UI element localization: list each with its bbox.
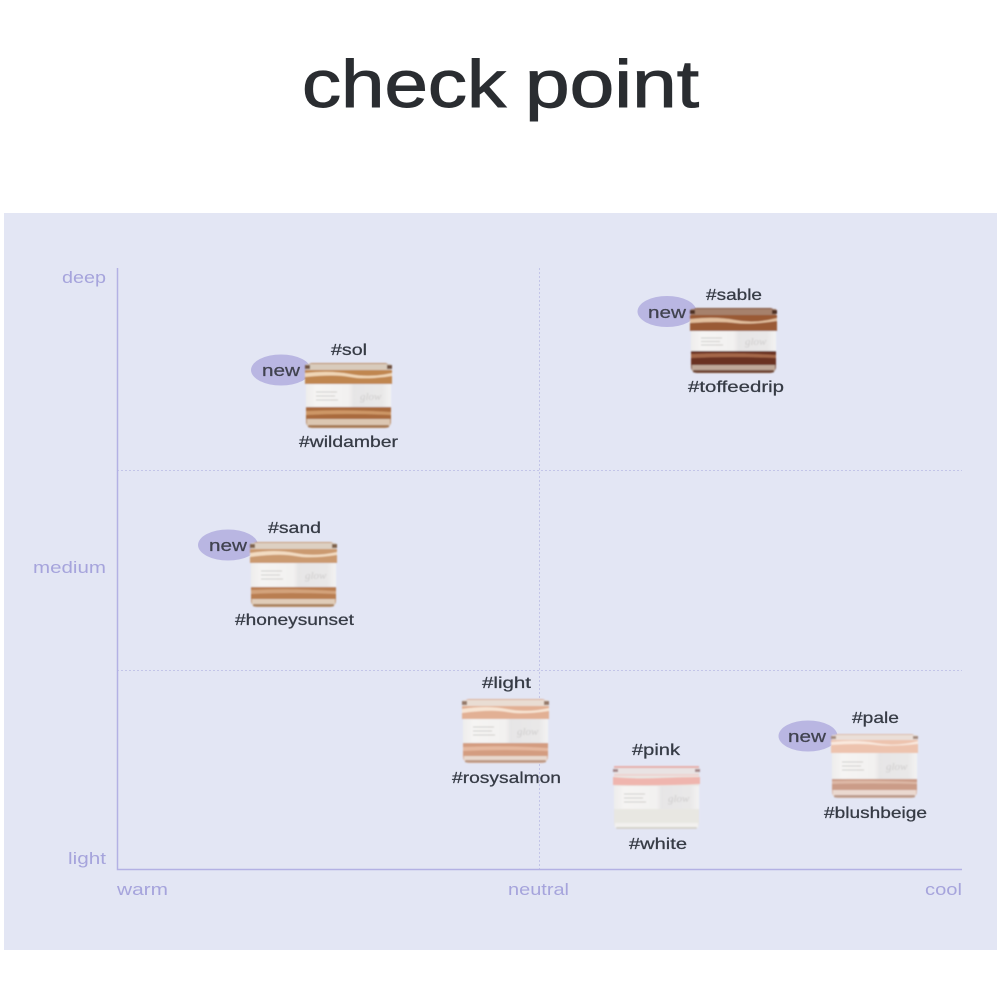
label detail: glow bbox=[668, 793, 690, 805]
grid lines bbox=[117, 268, 962, 869]
axes bbox=[118, 268, 962, 870]
new badge bbox=[638, 296, 696, 327]
top label: #pink bbox=[632, 742, 681, 759]
product: sol / wildamber bbox=[251, 342, 399, 451]
product: sand / honeysunset bbox=[198, 520, 355, 629]
y axis label: light: light bbox=[68, 849, 106, 868]
top label: #sol bbox=[331, 342, 367, 359]
jar bbox=[305, 363, 392, 428]
product: light / rosysalmon bbox=[452, 675, 561, 787]
panel: chart background bbox=[4, 213, 997, 950]
new badge: new bbox=[209, 536, 248, 555]
label detail: glow bbox=[886, 761, 908, 773]
new badge: new bbox=[788, 727, 827, 746]
label detail: glow bbox=[517, 726, 539, 738]
new badge: new bbox=[262, 361, 301, 380]
product: pink / white bbox=[613, 742, 700, 853]
product: sable / toffeedrip bbox=[638, 287, 784, 396]
label detail: glow bbox=[305, 570, 327, 582]
jar bbox=[690, 308, 777, 373]
new badge bbox=[778, 720, 838, 752]
x axis label: neutral: neutral bbox=[508, 880, 569, 899]
y axis label: medium: medium bbox=[33, 558, 106, 577]
new badge bbox=[251, 354, 311, 386]
top label: #sand bbox=[268, 520, 321, 537]
new badge: new bbox=[648, 303, 687, 322]
x axis label: warm: warm bbox=[116, 880, 168, 899]
jar bbox=[831, 734, 918, 798]
new badge bbox=[198, 530, 258, 560]
bottom label: #wildamber bbox=[299, 434, 399, 451]
x axis label: cool: cool bbox=[925, 880, 962, 899]
bottom label: #honeysunset bbox=[235, 612, 355, 629]
label detail: glow bbox=[745, 336, 767, 348]
top label: #pale bbox=[852, 710, 899, 727]
product: pale / blushbeige bbox=[778, 710, 927, 822]
title: point bbox=[525, 47, 699, 122]
bottom label: #toffeedrip bbox=[688, 379, 784, 396]
y axis label: deep: deep bbox=[62, 268, 106, 287]
jar bbox=[250, 542, 337, 607]
title: check bbox=[302, 47, 507, 122]
title bbox=[302, 47, 699, 122]
bottom label: #white bbox=[629, 836, 687, 853]
top label: #sable bbox=[706, 287, 762, 304]
bottom label: #blushbeige bbox=[824, 805, 927, 822]
label detail: glow bbox=[360, 391, 382, 403]
bottom label: #rosysalmon bbox=[452, 770, 561, 787]
top label: #light bbox=[482, 675, 532, 692]
